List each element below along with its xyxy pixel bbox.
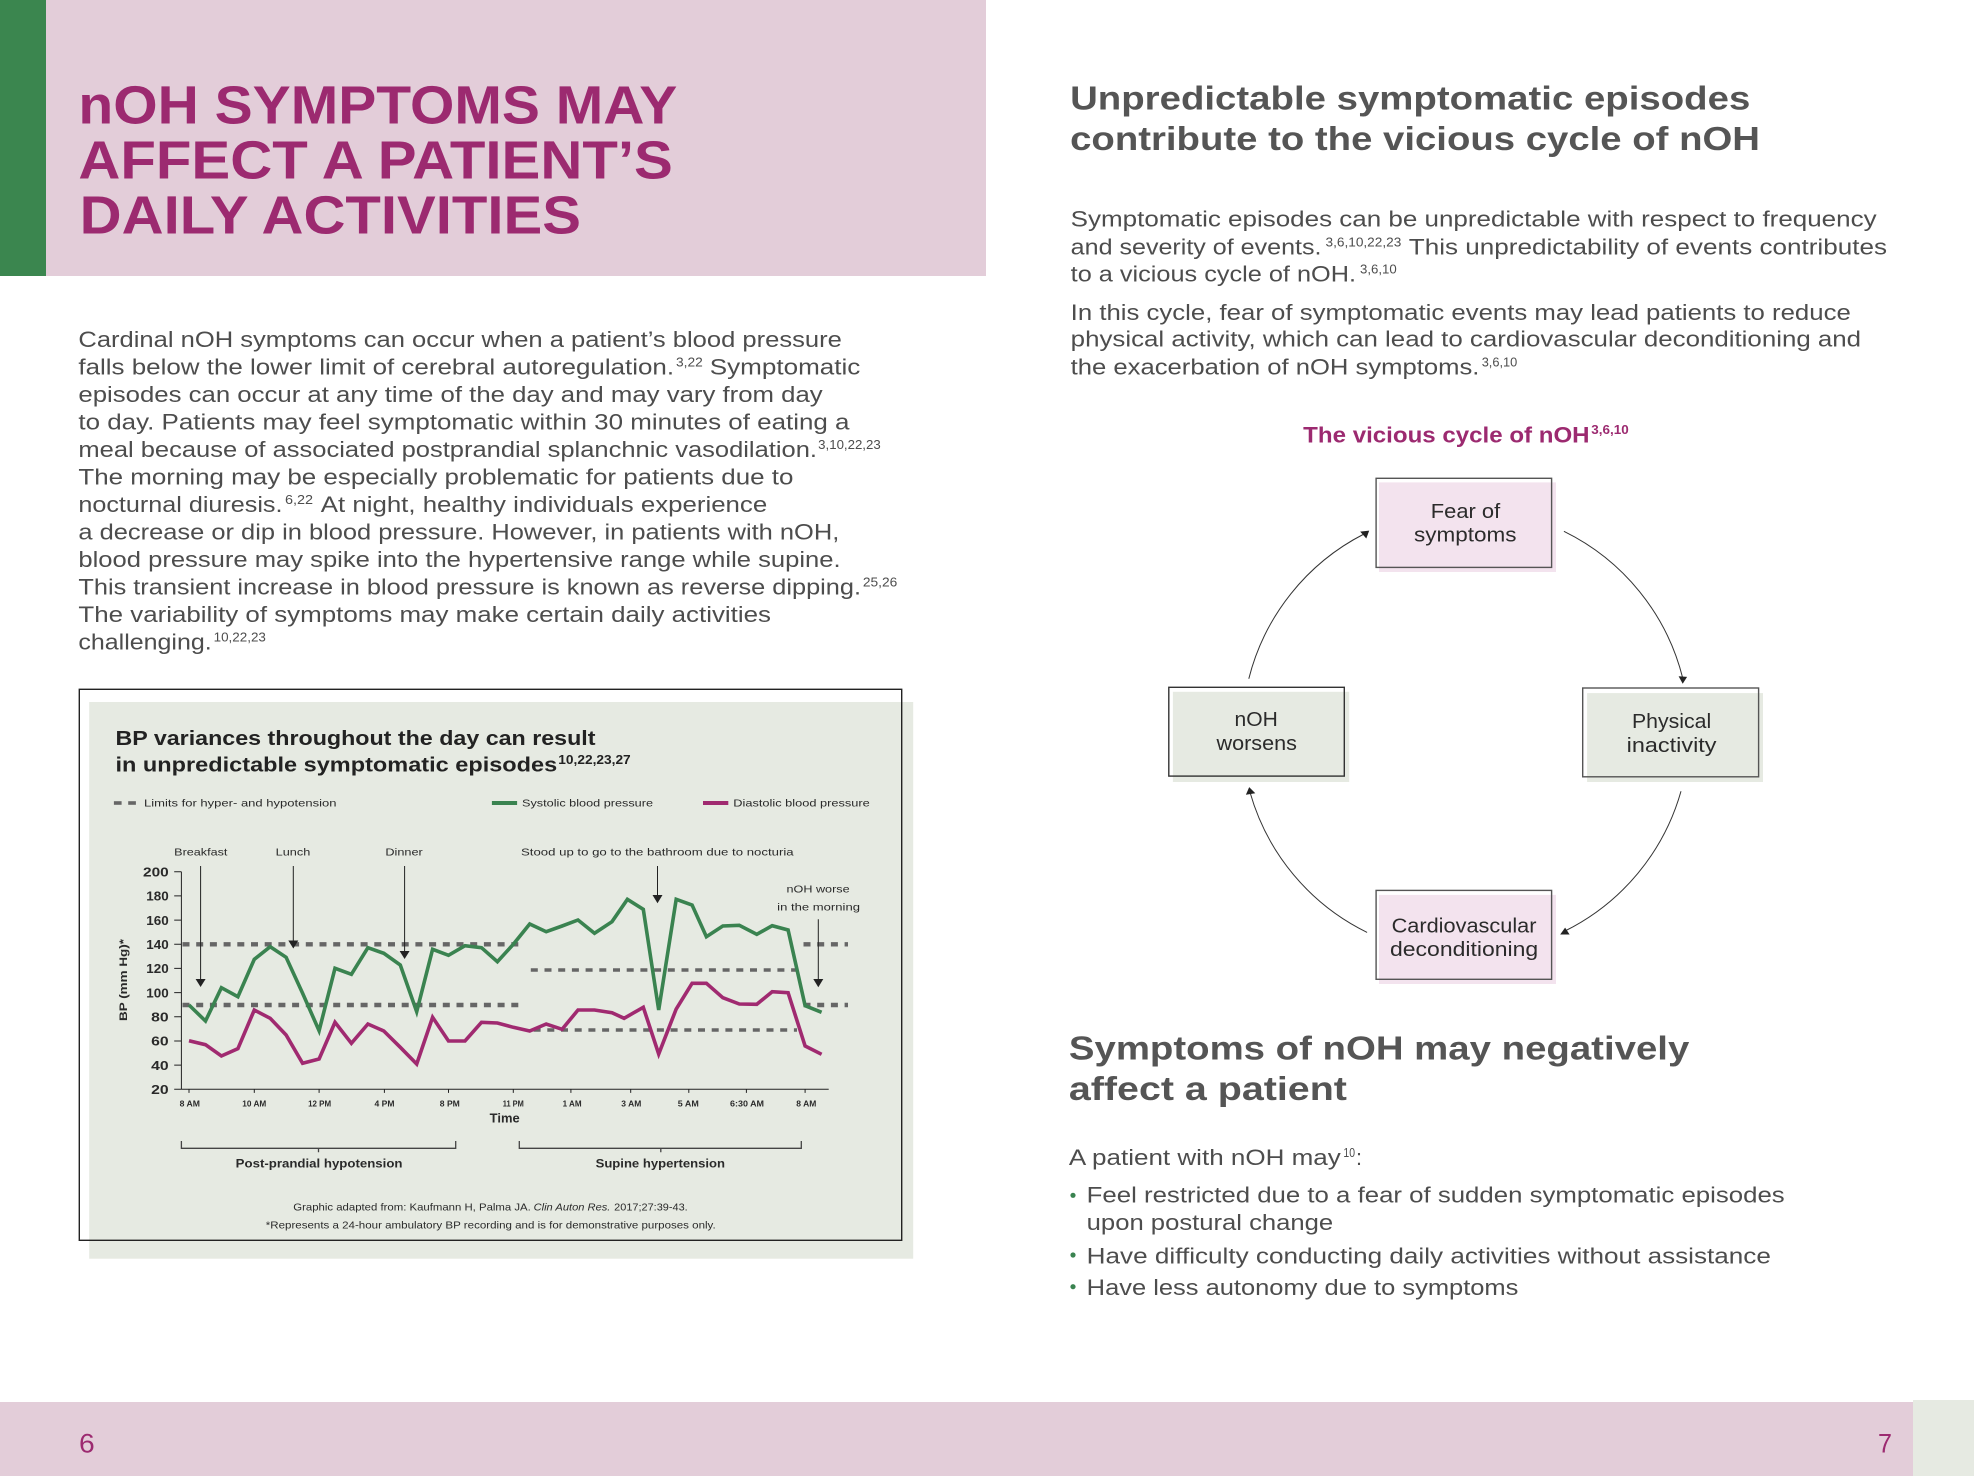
heading: symptoms of nOH may negatively affect a patient (1069, 1030, 1690, 1108)
box: cardiovascular deconditioning: Cardiovascular (1392, 914, 1537, 937)
text block: unpredictability paragraphs: to a vicious cycle of nOH. (1071, 262, 1356, 287)
x axis with labels: 4 PM (374, 1099, 394, 1109)
text block: cardinal symptoms paragraph: 6,22 (285, 492, 313, 507)
heading: symptoms of nOH may negatively affect a patient: affect a patient (1069, 1071, 1347, 1108)
heading: unpredictable symptomatic episodes (1070, 80, 1760, 158)
y axis with labels: 140 (146, 937, 169, 952)
text block: cardinal symptoms paragraph: 3,10,22,23 (818, 437, 881, 452)
bullet list: Have difficulty conducting daily activities without assistance (1087, 1243, 1771, 1268)
text block: cardinal symptoms paragraph: a decrease or dip in blood pressure. However, in patients with nOH, (78, 520, 839, 544)
box: nOH worsens: nOH (1234, 708, 1278, 731)
title: AFFECT A PATIENT’S (78, 132, 673, 191)
chart footnote: 2017;27:39-43. (614, 1202, 688, 1214)
arrow: fear to inactivity (1564, 531, 1687, 684)
y axis with labels: 100 (146, 985, 169, 1000)
event arrows and labels: Stood up to go to the bathroom due to nocturia (521, 847, 794, 859)
footer band with page numbers: 6 (79, 1429, 95, 1459)
text block: cardinal symptoms paragraph: At night, healthy individuals experience (321, 492, 767, 517)
arrow: deconditioning to nOH worsens (1246, 787, 1367, 932)
text block: cardinal symptoms paragraph: Symptomatic (710, 354, 860, 380)
title: nOH SYMPTOMS MAY (78, 77, 677, 136)
chart footnote: Graphic adapted from: Kaufmann H, Palma JA. (293, 1202, 531, 1214)
bracket: supine hypertension (519, 1141, 801, 1170)
x axis with labels: 1 AM (563, 1099, 582, 1109)
heading: symptoms of nOH may negatively affect a patient: Symptoms of nOH may negatively (1069, 1030, 1690, 1067)
text block: cardinal symptoms paragraph: blood pressure may spike into the hypertensive range while supine. (78, 547, 841, 572)
cycle diagram (1169, 478, 1763, 984)
box: fear of symptoms: symptoms (1414, 524, 1516, 547)
legend: Limits for hyper- and hypotension (144, 798, 337, 810)
diastolic blood pressure line (189, 983, 822, 1064)
text block: cardinal symptoms paragraph: 3,22 (676, 354, 703, 370)
event arrows and labels: in the morning (777, 902, 860, 914)
limit lines for hyper- and hypotension (182, 944, 848, 1030)
legend: Systolic blood pressure (522, 798, 653, 810)
y axis with labels: 40 (151, 1058, 169, 1073)
bracket: post-prandial hypotension: Post-prandial hypotension (236, 1156, 402, 1170)
text block: a patient with nOH may: A patient with nOH may (1069, 1145, 1341, 1170)
text block: cardinal symptoms paragraph: 10,22,23 (214, 630, 266, 644)
y axis with labels: 80 (151, 1010, 169, 1024)
x axis with labels: 8 PM (440, 1099, 460, 1109)
y axis with labels (118, 864, 181, 1097)
text block: unpredictability paragraphs: Symptomatic episodes can be unpredictable with respect to frequency (1071, 207, 1877, 232)
chart heading (116, 727, 631, 777)
heading: unpredictable symptomatic episodes: Unpredictable symptomatic episodes (1070, 80, 1750, 117)
title: DAILY ACTIVITIES (80, 187, 581, 246)
bracket: supine hypertension: Supine hypertension (596, 1156, 725, 1170)
text block: cardinal symptoms paragraph (78, 327, 897, 654)
chart heading: BP variances throughout the day can result (116, 727, 596, 750)
y axis with labels: 160 (146, 913, 169, 928)
text block: cardinal symptoms paragraph: falls below the lower limit of cerebral autoregulation. (78, 354, 674, 380)
chart footnote: Clin Auton Res. (534, 1202, 610, 1214)
arrow: nOH worsens to fear (1249, 531, 1369, 679)
text block: cardinal symptoms paragraph: challenging. (78, 630, 212, 654)
x axis with labels: 5 AM (678, 1099, 699, 1109)
text block: cardinal symptoms paragraph: 25,26 (863, 574, 897, 590)
box: nOH worsens: worsens (1215, 732, 1297, 755)
x axis with labels: 12 PM (308, 1099, 331, 1109)
text block: unpredictability paragraphs: 3,6,10,22,23 (1326, 234, 1401, 249)
text block: cardinal symptoms paragraph: The variability of symptoms may make certain daily activities (78, 602, 771, 627)
x axis with labels: 8 AM (796, 1099, 816, 1109)
text block: unpredictability paragraphs: 3,6,10 (1360, 262, 1397, 277)
bullet list: Feel restricted due to a fear of sudden symptomatic episodes (1087, 1183, 1785, 1208)
box: physical inactivity: inactivity (1627, 734, 1717, 757)
bullet list: Have less autonomy due to symptoms (1087, 1275, 1518, 1300)
footer band with page numbers (0, 1400, 1974, 1476)
box: physical inactivity (1583, 688, 1763, 782)
systolic blood pressure line (189, 899, 822, 1031)
title (78, 77, 677, 246)
heading: unpredictable symptomatic episodes: contribute to the vicious cycle of nOH (1070, 121, 1760, 158)
text block: cardinal symptoms paragraph: Cardinal nOH symptoms can occur when a patient’s blood pressure (78, 327, 842, 352)
text block: unpredictability paragraphs: physical activity, which can lead to cardiovascular deconditioning and (1071, 327, 1861, 352)
text block: a patient with nOH may: 10 (1343, 1145, 1355, 1160)
bracket: post-prandial hypotension (181, 1141, 456, 1170)
box: fear of symptoms (1376, 478, 1556, 572)
text block: cardinal symptoms paragraph: The morning may be especially problematic for patients due to (78, 464, 793, 490)
x axis with labels: Time (490, 1112, 520, 1126)
y axis with labels: 180 (146, 889, 169, 904)
x axis with labels: 11 PM (503, 1099, 524, 1109)
heading: the vicious cycle of nOH: 3,6,10 (1591, 422, 1629, 437)
box: nOH worsens (1169, 687, 1349, 782)
text block: cardinal symptoms paragraph: nocturnal diuresis. (78, 492, 283, 517)
x axis with labels: 8 AM (180, 1099, 200, 1109)
box: cardiovascular deconditioning: deconditioning (1390, 938, 1538, 961)
heading: the vicious cycle of nOH: The vicious cycle of nOH (1303, 423, 1590, 448)
x axis with labels: 10 AM (242, 1099, 266, 1109)
chart heading: in unpredictable symptomatic episodes (116, 754, 557, 777)
text block: unpredictability paragraphs: the exacerbation of nOH symptoms. (1071, 354, 1479, 379)
panel: BP variances chart (79, 689, 913, 1259)
y axis with labels: 60 (151, 1034, 169, 1049)
text block: unpredictability paragraphs: 3,6,10 (1482, 354, 1517, 369)
text block: unpredictability paragraphs (1071, 207, 1887, 379)
event arrows and labels: Breakfast (174, 847, 227, 859)
event arrows and labels: Lunch (276, 847, 310, 859)
x axis with labels (180, 1089, 829, 1126)
box: cardiovascular deconditioning (1376, 890, 1556, 984)
chart heading: 10,22,23,27 (558, 753, 631, 767)
box: fear of symptoms: Fear of (1431, 500, 1501, 523)
y axis with labels: 120 (146, 961, 169, 976)
arrow: inactivity to deconditioning (1560, 791, 1681, 934)
bullet list: upon postural change (1087, 1210, 1333, 1235)
x axis with labels: 3 AM (621, 1099, 641, 1109)
chart footnote: *Represents a 24-hour ambulatory BP recording and is for demonstrative purposes only. (266, 1220, 716, 1232)
y axis with labels: BP (mm Hg)* (118, 938, 130, 1021)
text block: cardinal symptoms paragraph: This transient increase in blood pressure is known as reverse dipping. (78, 574, 861, 600)
legend (114, 798, 870, 810)
y axis with labels: 200 (143, 864, 169, 879)
legend: Diastolic blood pressure (733, 798, 870, 810)
event arrows and labels (174, 847, 860, 987)
event arrows and labels: nOH worse (786, 884, 850, 896)
text block: unpredictability paragraphs: In this cycle, fear of symptomatic events may lead patients to reduce (1071, 300, 1851, 325)
text block: a patient with nOH may: : (1356, 1145, 1362, 1170)
header band: left page title (0, 0, 986, 276)
text block: unpredictability paragraphs: This unpredictability of events contributes (1409, 234, 1887, 259)
box: physical inactivity: Physical (1632, 710, 1711, 733)
text block: unpredictability paragraphs: and severity of events. (1071, 234, 1322, 259)
text block: cardinal symptoms paragraph: to day. Patients may feel symptomatic within 30 minutes of eating a (78, 410, 850, 434)
y axis with labels: 20 (151, 1082, 169, 1097)
chart footnote (266, 1202, 716, 1232)
text block: cardinal symptoms paragraph: episodes can occur at any time of the day and may vary from day (78, 382, 823, 407)
x axis with labels: 6:30 AM (730, 1099, 764, 1109)
text block: cardinal symptoms paragraph: meal because of associated postprandial splanchnic vasodilation. (78, 437, 817, 462)
bullet list (1070, 1183, 1785, 1300)
footer band with page numbers: 7 (1878, 1429, 1892, 1459)
event arrows and labels: Dinner (385, 847, 423, 859)
